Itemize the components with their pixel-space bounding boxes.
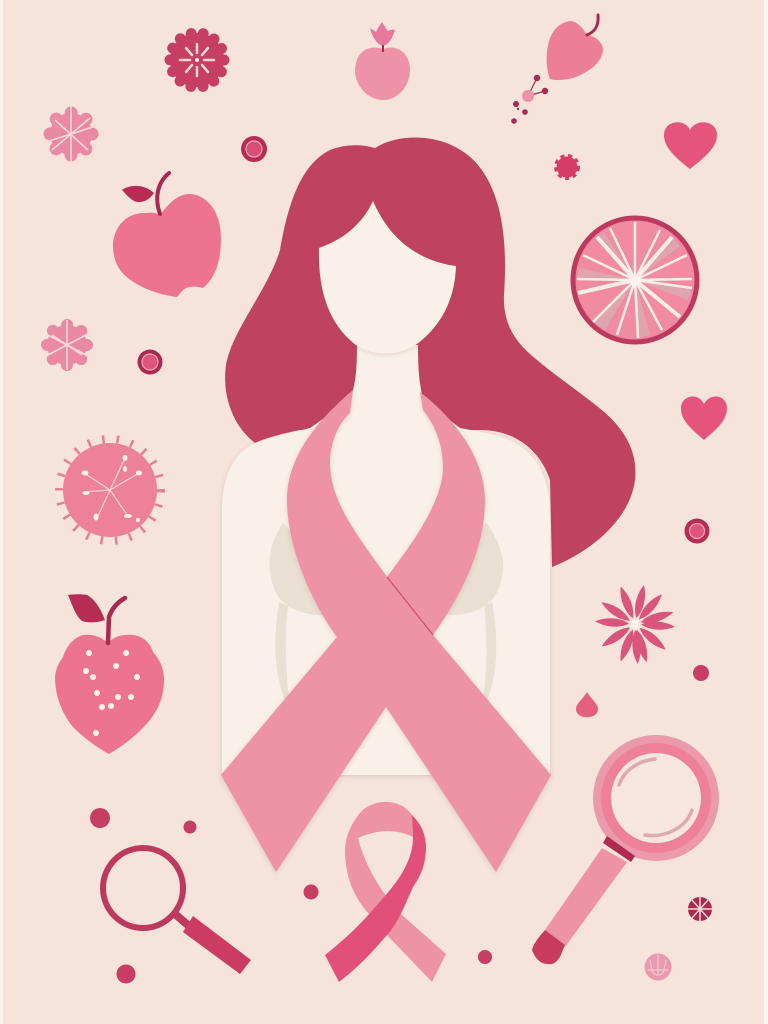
left bra cup [270, 523, 325, 615]
large pink awareness ribbon [221, 390, 551, 872]
woman's body [222, 345, 550, 775]
woman's hair [225, 138, 635, 567]
small ribbon bottom [325, 802, 446, 982]
right arm crease [481, 602, 496, 714]
apple top right [547, 15, 603, 80]
molecule sprig [511, 75, 548, 124]
flower upper left [46, 106, 96, 162]
magnifying glass right [532, 735, 719, 964]
small flower lower right [688, 897, 712, 921]
right bra cup [447, 523, 503, 615]
heart right [681, 396, 727, 440]
magnifying glass left [103, 848, 251, 974]
face [319, 201, 456, 354]
spiky cell [59, 439, 161, 541]
small flower bottom right [644, 954, 672, 980]
heart upper right [664, 122, 717, 169]
scattered dots [90, 665, 709, 984]
fruit top center [355, 22, 410, 100]
flower middle left [46, 320, 88, 370]
badge left [138, 350, 162, 374]
apple upper left [113, 173, 221, 297]
badge right [684, 518, 710, 544]
flower top [170, 33, 224, 87]
small drop [576, 692, 598, 717]
starburst flower [595, 584, 675, 664]
citrus slice [573, 218, 697, 342]
apple with seeds [55, 594, 164, 754]
badge upper [241, 136, 267, 162]
left arm crease [275, 602, 291, 714]
small spiky flower top right [556, 156, 578, 178]
